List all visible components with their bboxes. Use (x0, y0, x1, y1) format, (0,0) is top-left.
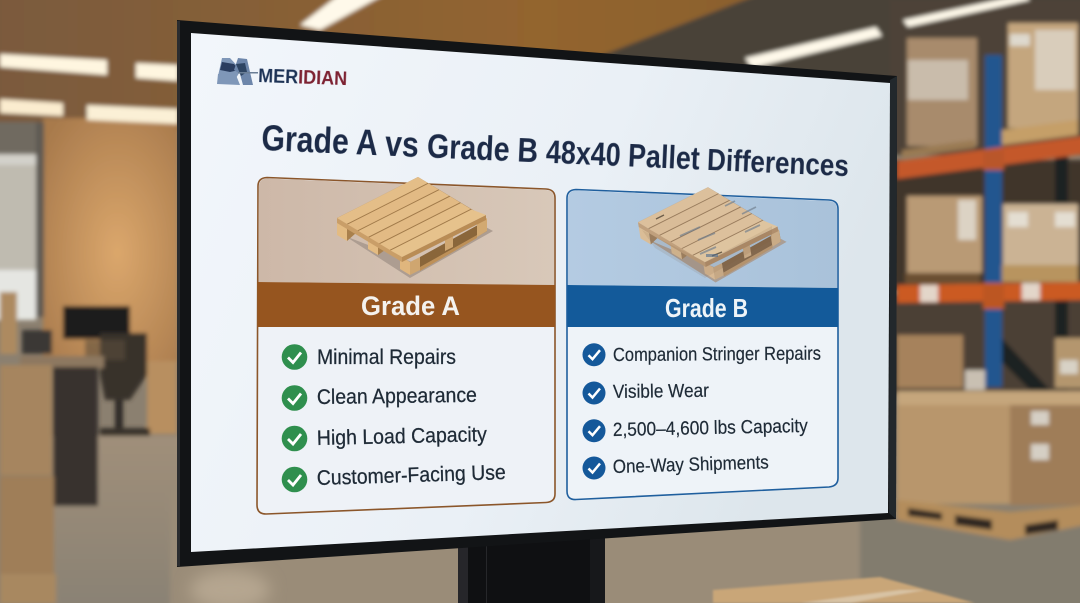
orange beams (897, 136, 1080, 179)
item: 2,500–4,600 lbs Capacity: 2,500–4,600 lbs Capacity (613, 416, 809, 441)
item: Companion Stringer Repairs: Companion Stringer Repairs (613, 344, 821, 366)
ceiling lights (0, 54, 107, 75)
monitor stand (458, 535, 605, 603)
floor patches (190, 570, 270, 603)
item: Visible Wear: Visible Wear (613, 381, 710, 403)
item: Minimal Repairs (282, 344, 456, 370)
left wall (43, 118, 178, 363)
item: One-Way Shipments: One-Way Shipments (613, 452, 769, 478)
Grade B heading: Grade B (665, 293, 748, 323)
right rack backdrop (890, 0, 1080, 155)
Grade B band (568, 285, 838, 327)
pallet image: Grade A (337, 177, 493, 278)
panel B body (567, 190, 838, 500)
item: Clean Appearance: Clean Appearance (317, 384, 477, 409)
cardboard box in foreground (713, 577, 975, 603)
title: Grade A vs Grade B 48x40 Pallet Differences (261, 117, 850, 184)
panel: Grade A (257, 177, 555, 514)
item: High Load Capacity: High Load Capacity (317, 423, 488, 450)
floor (52, 436, 182, 603)
item: Visible Wear (582, 381, 710, 404)
pallet image: Grade B (632, 183, 794, 286)
item: Minimal Repairs: Minimal Repairs (317, 346, 456, 369)
Grade A band (258, 282, 555, 327)
monitor frame (177, 20, 897, 567)
panel A image area (258, 178, 554, 285)
panel B image area (568, 190, 837, 288)
logo wordmark: MERIDIAN (258, 66, 348, 90)
panel: Grade B (567, 183, 838, 500)
ceiling (0, 0, 1080, 130)
upper pallet loads (907, 38, 977, 146)
middle pallet loads (907, 196, 982, 273)
logo: Meridian (217, 58, 348, 90)
logo mark (217, 58, 258, 85)
desk and boxes (20, 356, 104, 368)
screen (191, 33, 890, 552)
panel A body (257, 178, 555, 514)
lower boxes (897, 335, 963, 388)
item: Customer-Facing Use: Customer-Facing Use (316, 461, 506, 490)
floor pallet (897, 500, 1080, 540)
blue upright (985, 55, 1002, 387)
Grade A heading: Grade A (361, 291, 460, 321)
